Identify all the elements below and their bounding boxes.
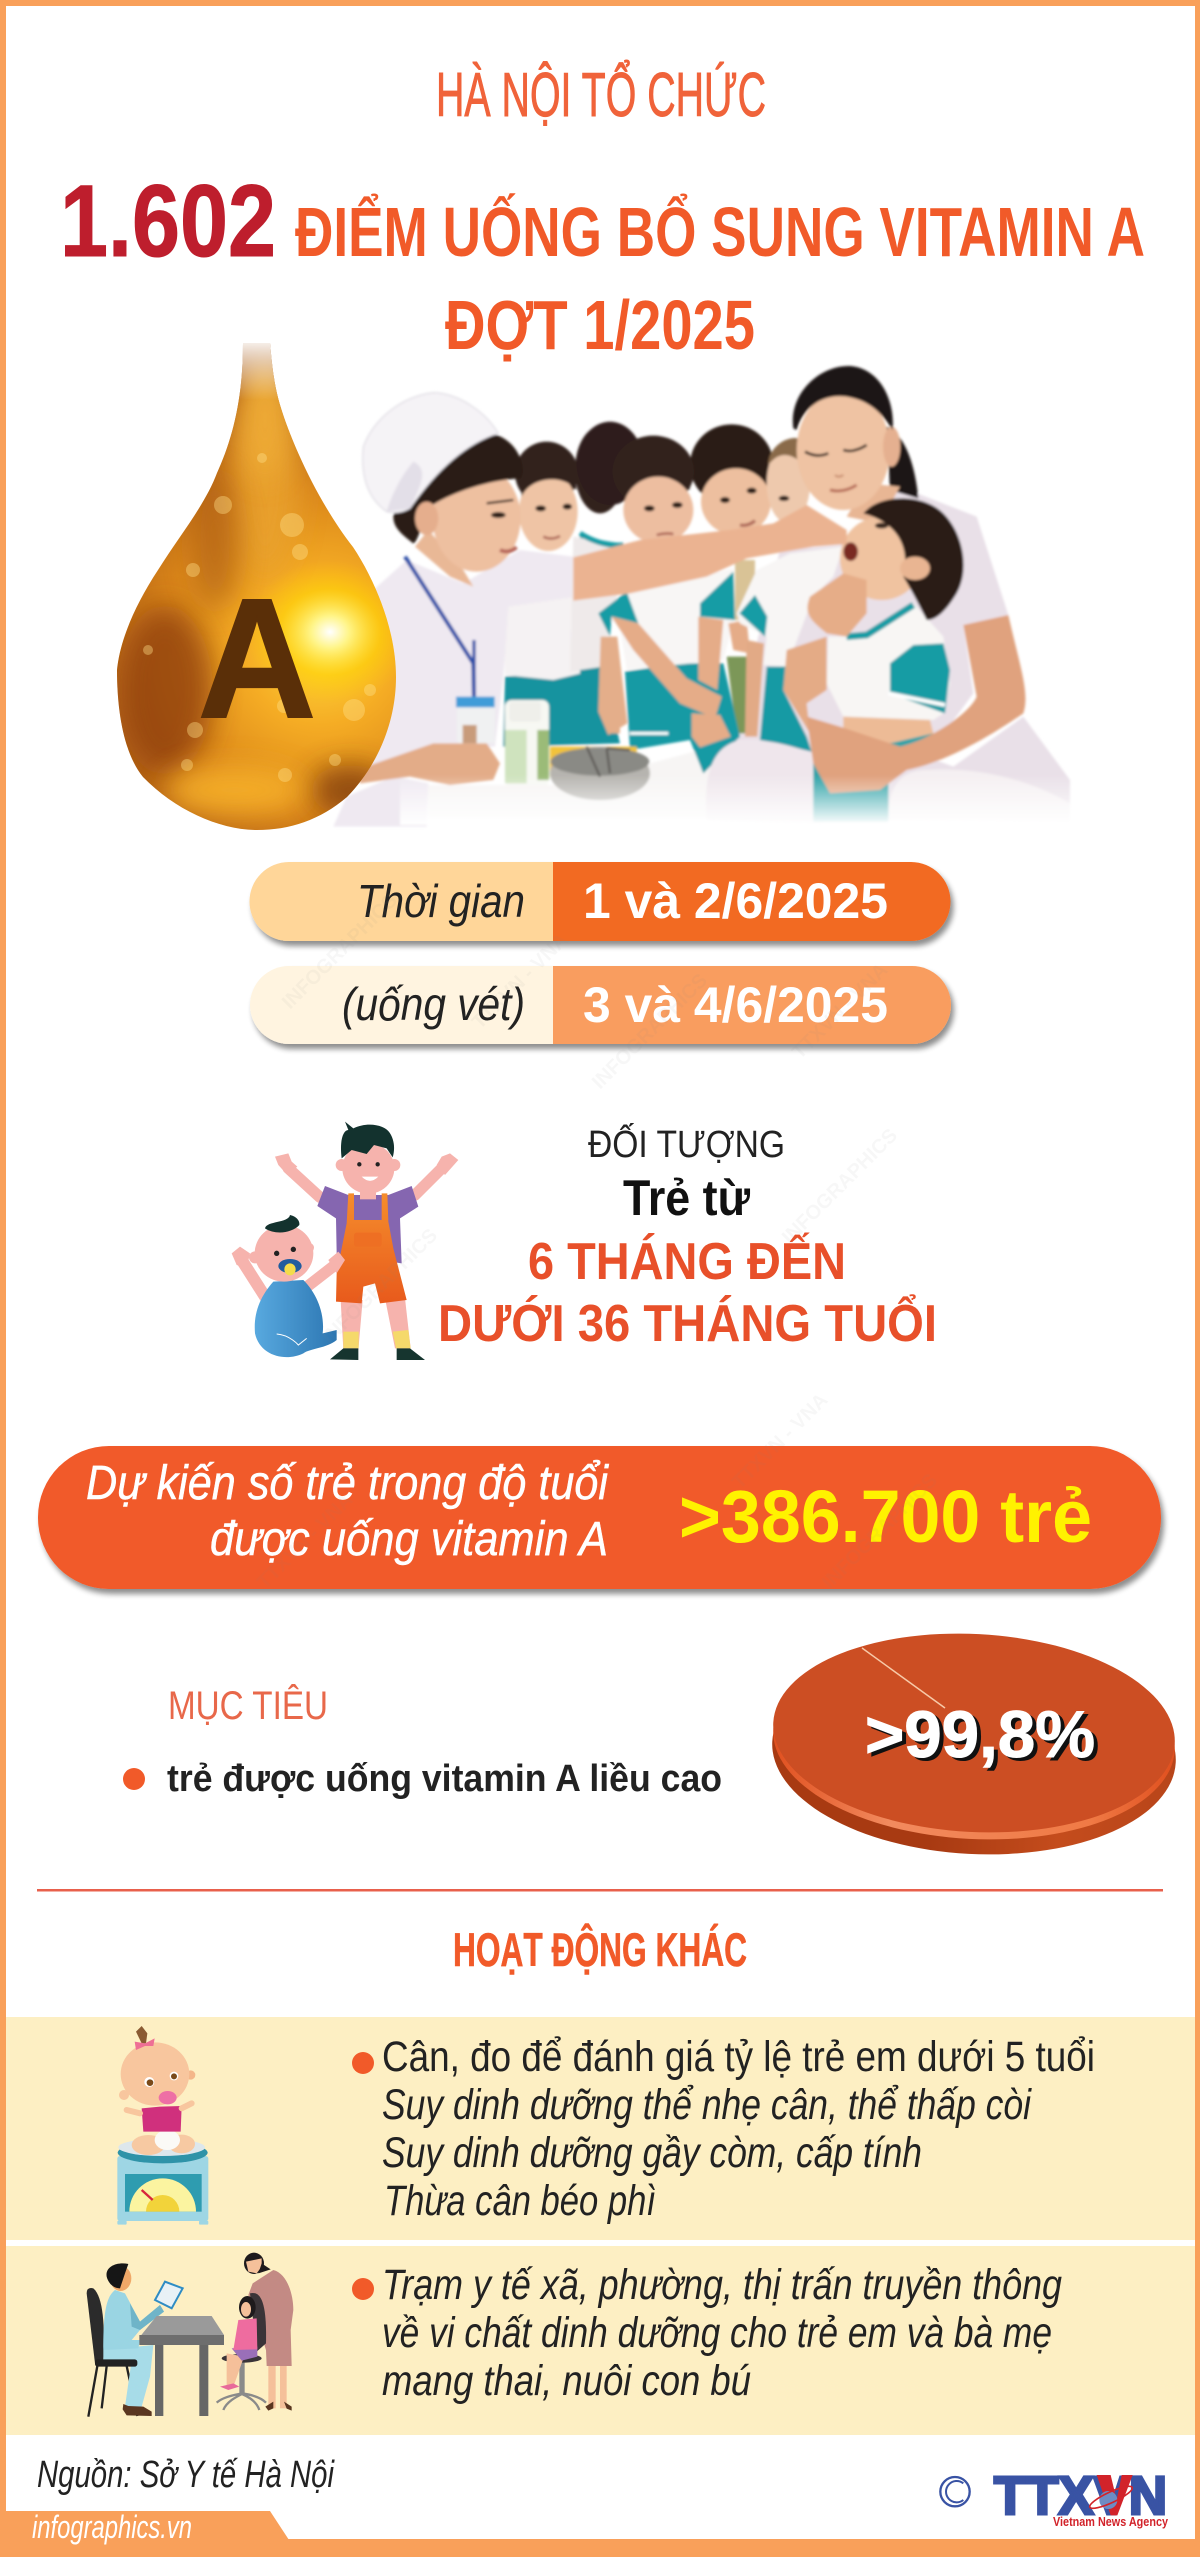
nurse and first child <box>333 393 625 827</box>
letter A: A <box>198 564 316 754</box>
target group text: Trẻ từ <box>623 1170 751 1226</box>
schedule pill: uống vét: 3 và 4/6/2025 <box>583 977 888 1033</box>
infographic canvas: TTXVN - VNA <box>253 1489 357 1594</box>
table <box>428 750 722 818</box>
photo: nurse giving vitamin A to children <box>333 366 1100 827</box>
mother torso <box>713 487 1070 817</box>
boy <box>275 1122 458 1360</box>
target group text: 6 THÁNG ĐẾN <box>528 1232 846 1291</box>
activity text: weighing: Suy dinh dưỡng thể nhẹ cân, thể thấp còi <box>382 2081 1032 2129</box>
activity text: weighing: Thừa cân béo phì <box>384 2177 656 2225</box>
activity text: communication: Trạm y tế xã, phường, thị trấn truyền thông <box>382 2261 1062 2309</box>
icon: baby on scale <box>117 2026 208 2225</box>
banner: expected children: Dự kiến số trẻ trong độ tuổi <box>86 1457 609 1510</box>
schedule pill: uống vét <box>250 966 951 1044</box>
title <box>60 164 1145 364</box>
mother ponytail <box>887 427 918 498</box>
activity text: communication: mang thai, nuôi con bú <box>382 2357 751 2405</box>
activity text: weighing <box>352 2033 1095 2225</box>
infographic canvas: INFOGRAPHICS <box>818 1470 942 1594</box>
title: 1.602 <box>60 164 276 278</box>
infographic canvas: INFOGRAPHICS <box>278 890 402 1014</box>
title: ĐỢT 1/2025 <box>445 286 755 364</box>
panel: communication activity <box>6 2246 1195 2435</box>
icon: doctor consultation <box>87 2253 293 2417</box>
pie disc: 99.8 percent: >99,8% <box>865 1697 1095 1771</box>
source: Nguồn: Sở Y tế Hà Nội <box>37 2454 335 2496</box>
activity text: weighing: Cân, đo để đánh giá tỷ lệ trẻ em dưới 5 tuổi <box>382 2033 1095 2081</box>
pie disc: 99.8 percent <box>767 1624 1181 1864</box>
infographic canvas: TTXVN - VNA <box>728 1389 832 1494</box>
footer tab: infographics.vn: infographics.vn <box>32 2509 192 2545</box>
target group text: DƯỚI 36 THÁNG TUỔI <box>438 1294 937 1353</box>
banner: expected children: >386.700 trẻ <box>679 1475 1092 1558</box>
baby <box>813 733 933 822</box>
dish and bowl <box>550 747 637 777</box>
nurse arm and hand <box>573 505 847 601</box>
logo: TTXVN: TTXVN <box>994 2466 1167 2526</box>
heading: other activities: HOẠT ĐỘNG KHÁC <box>453 1923 747 1976</box>
target text <box>123 1683 722 1800</box>
infographic canvas: TTXVN - VNA <box>788 959 892 1064</box>
bottom fade <box>400 775 1100 825</box>
schedule pill: Thời gian: 1 và 2/6/2025 <box>583 873 888 929</box>
infographic canvas: INFOGRAPHICS <box>318 1225 442 1349</box>
infographic canvas: TTXVN - VNA <box>468 929 572 1034</box>
panel: weighing activity <box>6 2017 1195 2240</box>
copyright symbol <box>940 2477 970 2506</box>
target text: trẻ được uống vitamin A liều cao <box>167 1758 722 1800</box>
baby <box>232 1215 345 1357</box>
icon: two children <box>232 1122 458 1360</box>
activity text: weighing: Suy dinh dưỡng gầy còm, cấp tính <box>382 2129 922 2177</box>
schedule pill: uống vét: (uống vét) <box>342 978 525 1030</box>
logo: TTXVN: Vietnam News Agency <box>1053 2515 1168 2529</box>
schedule pill: Thời gian <box>250 862 950 941</box>
pie disc: 99.8 percent: >99,8% <box>869 1700 1099 1774</box>
schedule pill: Thời gian: Thời gian <box>357 875 525 927</box>
boy <box>735 560 755 620</box>
second girl <box>613 436 694 508</box>
target group text: ĐỐI TƯỢNG <box>588 1121 785 1166</box>
activity text: communication: về vi chất dinh dưỡng cho trẻ em và bà mẹ <box>382 2309 1052 2357</box>
infographic canvas: INFOGRAPHICS <box>778 1125 902 1249</box>
mother knees <box>706 740 823 823</box>
target group text <box>438 1121 937 1353</box>
mother head <box>847 483 900 523</box>
fourth child <box>767 443 810 523</box>
vitamin A drop <box>117 343 396 830</box>
target text: MỤC TIÊU <box>168 1683 328 1728</box>
activity text: communication <box>352 2261 1062 2405</box>
children and mother <box>550 366 1070 823</box>
infographic canvas: INFOGRAPHICS <box>588 970 712 1094</box>
banner: expected children <box>38 1446 1161 1589</box>
heading: Hà Nội tổ chức: HÀ NỘI TỔ CHỨC <box>436 60 766 130</box>
banner: expected children: được uống vitamin A <box>210 1513 608 1566</box>
